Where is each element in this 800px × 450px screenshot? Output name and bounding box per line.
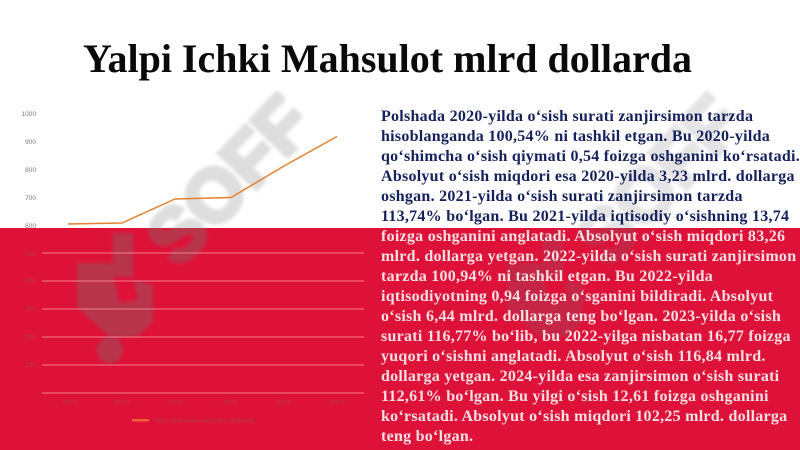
body text: foizga oshganini anglatadi. Absolyut o‘sish miqdori 83,26 <box>381 228 785 245</box>
y axis labels: 900 <box>25 139 36 146</box>
y axis labels <box>22 111 36 369</box>
body text: hisoblanganda 100,54% ni tashkil etgan. Bu 2020-yilda <box>381 128 770 145</box>
watermark: left SOFF on white: SOFF <box>130 80 327 280</box>
x axis labels: 2020 <box>115 399 130 406</box>
body text: mlrd. dollarga yetgan. 2022-yilda o‘sish surati zanjirsimon <box>381 248 796 265</box>
x axis labels: 2023 <box>276 399 291 406</box>
body text: surati 116,77% bo‘lib, bu 2022-yilga nisbatan 16,77 foizga <box>381 328 791 345</box>
body text: iqtisodiyotning 0,94 foizga o‘sganini bildiradi. Absolyut <box>381 288 773 305</box>
y axis labels: 500 <box>25 251 36 258</box>
body text: tarzda 100,94% ni tashkil etgan. Bu 2022-yilda <box>381 268 713 285</box>
body text: Absolyut o‘sish miqdori esa 2020-yilda 3,23 mlrd. dollarga <box>381 168 795 185</box>
red lower band <box>0 228 800 450</box>
body text: oshgan. 2021-yilda o‘sish surati zanjirsimon tarzda <box>381 188 743 205</box>
y axis labels: 400 <box>25 278 36 285</box>
watermark: right SOFF on white: SOFF <box>560 80 757 280</box>
GDP line series <box>68 136 337 224</box>
gridlines <box>42 253 364 393</box>
legend: Yalpi ichki mahsulot mlrd dollarda <box>153 418 254 424</box>
body text <box>381 108 800 445</box>
watermark: left SOFF and logo on red: SOFF <box>130 80 327 280</box>
background with flag bands, watermarks and line chart <box>0 90 800 450</box>
y axis labels: 600 <box>25 223 36 230</box>
y axis labels: 200 <box>25 334 36 341</box>
body text: yuqori o‘sishni anglatadi. Absolyut o‘sish 116,84 mlrd. <box>381 348 766 365</box>
y axis labels: 1000 <box>22 111 36 118</box>
body text: 112,61% bo‘lgan. Bu yilgi o‘sish 12,61 foizga oshganini <box>381 388 769 405</box>
line chart <box>22 111 364 424</box>
watermark: left SOFF and logo on red <box>76 228 208 364</box>
x axis labels: 2021 <box>169 399 184 406</box>
x axis labels: 2022 <box>223 399 238 406</box>
body text: Polshada 2020-yilda o‘sish surati zanjirsimon tarzda <box>381 108 753 125</box>
x axis labels: 2019 <box>62 399 77 406</box>
body text: 113,74% bo‘lgan. Bu 2021-yilda iqtisodiy o‘sishning 13,74 <box>381 208 789 225</box>
y axis labels: 700 <box>25 195 36 202</box>
body text: qo‘shimcha o‘sish qiymati 0,54 foizga oshganini ko‘rsatadi. <box>381 148 800 165</box>
body text: o‘sish 6,44 mlrd. dollarga teng bo‘lgan. 2023-yilda o‘sish <box>381 308 781 325</box>
body text: teng bo‘lgan. <box>381 428 473 445</box>
y axis labels: 100 <box>25 362 36 369</box>
x axis labels: 2024 <box>330 399 345 406</box>
y axis labels: 800 <box>25 167 36 174</box>
y axis labels: 300 <box>25 306 36 313</box>
body text: dollarga yetgan. 2024-yilda esa zanjirsimon o‘sish surati <box>381 368 779 385</box>
x axis labels <box>62 399 345 406</box>
title: Yalpi Ichki Mahsulot mlrd dollarda <box>83 36 692 81</box>
body text: ko‘rsatadi. Absolyut o‘sish miqdori 102,25 mlrd. dollarga <box>381 408 787 425</box>
watermark: right SOFF and logo on red <box>506 228 638 338</box>
watermark: right SOFF and logo on red: SOFF <box>560 80 757 280</box>
